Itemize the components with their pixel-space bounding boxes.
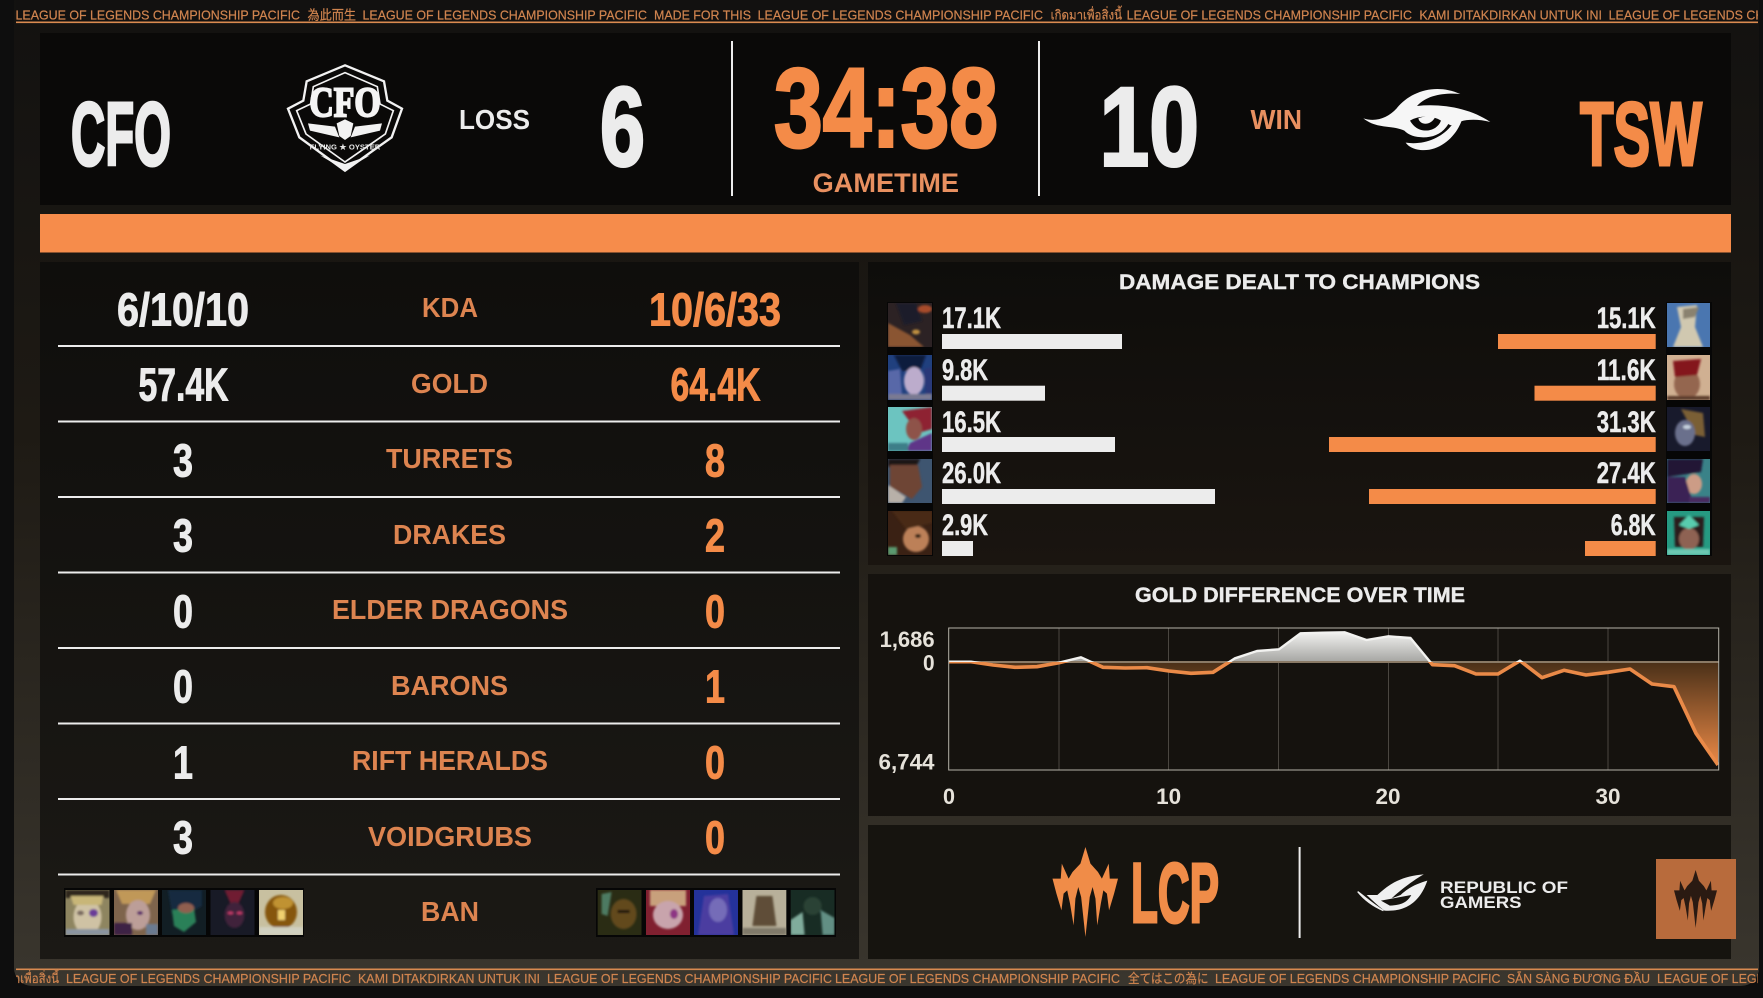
y axis labels: 1,686 (880, 627, 935, 652)
row: gold: 57.4K (138, 358, 228, 410)
row: elder dragons: 0 (173, 586, 193, 638)
bottom ticker: LEAGUE OF LEGENDS CHAMPIONSHIP PACIFIC (1215, 971, 1500, 986)
CFO row 1 (942, 302, 1122, 349)
y axis labels: 0 (923, 651, 935, 676)
TSW row 5 (1585, 509, 1656, 556)
TSW kills: 10 (1100, 64, 1199, 190)
CFO ban portraits (64, 888, 304, 937)
panel: match stats (40, 262, 859, 959)
heading: GOLD DIFFERENCE OVER TIME (1135, 583, 1465, 607)
x axis labels: 30 (1596, 784, 1620, 809)
row: barons: BARONS (391, 670, 508, 701)
row: bans (64, 888, 836, 937)
bottom ticker (0, 968, 1763, 986)
orange banner bar (40, 214, 1731, 252)
CFO row 4 (942, 457, 1215, 504)
bottom ticker: LEAGUE OF LEGENDS CHAMPIONSHIP PACIFIC (547, 971, 832, 986)
row: bans: BAN (421, 896, 479, 927)
top ticker: เกิดมาเพื่อสิ่งนี้ (1051, 6, 1122, 22)
row: rift heralds: 0 (705, 736, 725, 788)
bottom ticker: SẴN SÀNG ĐƯƠNG ĐẦU (1507, 971, 1650, 986)
CFO row 1: 17.1K (942, 302, 1001, 335)
row: rift heralds: 1 (173, 736, 193, 788)
row: voidgrubs: 3 (173, 812, 193, 864)
row: voidgrubs (173, 812, 725, 864)
TSW row 1 (1498, 302, 1656, 349)
icon: CFO logo: FLYING ★ OYSTER (310, 142, 381, 151)
row: turrets (173, 434, 725, 486)
bottom ticker: LEAGUE OF LEGENDS CHAMPIONSHIP PACIFIC (835, 971, 1120, 986)
row: turrets: TURRETS (386, 443, 513, 474)
CFO champion portraits (887, 302, 933, 556)
TSW ban portraits (596, 888, 836, 937)
icon: LCP crest (1052, 847, 1118, 937)
panel: gold difference over time (868, 574, 1731, 816)
top ticker (16, 6, 1758, 24)
x axis labels: 0 (943, 784, 955, 809)
y axis labels (878, 627, 935, 774)
row: rift heralds (173, 736, 725, 788)
panel: damage dealt to champions (868, 262, 1731, 565)
top ticker: MADE FOR THIS (654, 8, 751, 22)
row: elder dragons (173, 586, 725, 638)
x axis labels: 20 (1376, 784, 1400, 809)
row: drakes: 2 (705, 510, 725, 562)
row: drakes: 3 (173, 510, 193, 562)
CFO row 2 (942, 354, 1045, 401)
top ticker: KAMI DITAKDIRKAN UNTUK INI (1419, 8, 1602, 22)
row: gold (138, 358, 760, 410)
panel: match header (40, 33, 1731, 205)
x axis labels: 10 (1156, 784, 1181, 809)
row: voidgrubs: VOIDGRUBS (368, 821, 532, 852)
game time: 34:38 (774, 46, 998, 170)
row: KDA: KDA (422, 292, 478, 323)
row: voidgrubs: 0 (705, 812, 725, 864)
bottom ticker: KAMI DITAKDIRKAN UNTUK INI (358, 971, 540, 986)
icon: Team Secret logo (1363, 89, 1490, 150)
top ticker: LEAGUE OF LEGENDS CHAMPIONSHIP PACIFIC (16, 8, 300, 22)
row: KDA: 6/10/10 (117, 284, 249, 336)
top ticker: LEAGUE OF LEGENDS CHAMPIONSHIP PACIFIC (758, 8, 1043, 22)
TSW row 1: 15.1K (1597, 302, 1656, 335)
row: gold: GOLD (411, 368, 488, 399)
x axis labels (943, 784, 1620, 809)
CFO row 3 (942, 406, 1115, 452)
row: turrets: 8 (705, 434, 725, 486)
row: KDA (117, 284, 781, 336)
row: elder dragons: ELDER DRAGONS (332, 594, 568, 625)
Republic of Gamers wordmark (1440, 878, 1568, 912)
TSW row 3: 31.3K (1597, 406, 1656, 439)
bottom ticker: LEAGUE OF LEGENDS CHAMPIONSHIP PACIFIC (66, 971, 351, 986)
TSW row 5: 6.8K (1611, 509, 1656, 542)
line chart (949, 628, 1719, 770)
CFO row 4: 26.0K (942, 457, 1001, 490)
CFO row 3: 16.5K (942, 406, 1001, 439)
result: LOSS: LOSS (459, 104, 530, 135)
row: drakes: DRAKES (393, 519, 506, 550)
row: elder dragons: 0 (705, 586, 725, 638)
row: KDA: 10/6/33 (649, 284, 781, 336)
CFO kills: 6 (600, 64, 645, 190)
y axis labels: 6,744 (878, 749, 935, 774)
CFO row 2: 9.8K (942, 354, 988, 387)
row: turrets: 3 (173, 434, 193, 486)
row: drakes (173, 510, 725, 562)
result: WIN: WIN (1250, 104, 1302, 135)
orange LCP badge (1656, 859, 1736, 939)
row: barons: 1 (705, 660, 725, 712)
TSW row 2 (1534, 354, 1656, 401)
row: barons: 0 (173, 660, 193, 712)
TSW champion portraits (1666, 302, 1712, 556)
row: rift heralds: RIFT HERALDS (352, 745, 548, 776)
TSW row 3 (1329, 406, 1656, 452)
row: gold: 64.4K (670, 358, 760, 410)
TSW row 4: 27.4K (1597, 457, 1656, 490)
icon: ROG logo (1358, 874, 1427, 911)
CFO row 5: 2.9K (942, 509, 988, 542)
row: barons (173, 660, 725, 712)
bottom ticker: 全てはこの為に (1128, 971, 1208, 986)
Republic of Gamers wordmark: REPUBLIC OF (1440, 878, 1568, 897)
team name: CFO: CFO (71, 85, 171, 185)
panel: sponsors (868, 825, 1736, 959)
top ticker: LEAGUE OF LEGENDS CHAMPIONSHIP PACIFIC (1127, 8, 1412, 22)
game time label: GAMETIME (813, 168, 959, 198)
CFO row 5 (942, 509, 988, 556)
icon: CFO logo (288, 65, 402, 171)
top ticker: 為此而生 (308, 8, 356, 22)
icon: CFO logo: CFO (309, 80, 381, 127)
TSW row 4 (1369, 457, 1656, 504)
Republic of Gamers wordmark: GAMERS (1440, 893, 1522, 912)
TSW row 2: 11.6K (1597, 354, 1656, 387)
top ticker: LEAGUE OF LEGENDS CHAMPIONSHIP PACIFIC (362, 8, 647, 22)
heading: DAMAGE DEALT TO CHAMPIONS (1119, 270, 1480, 294)
LCP wordmark: LCP (1131, 846, 1219, 940)
